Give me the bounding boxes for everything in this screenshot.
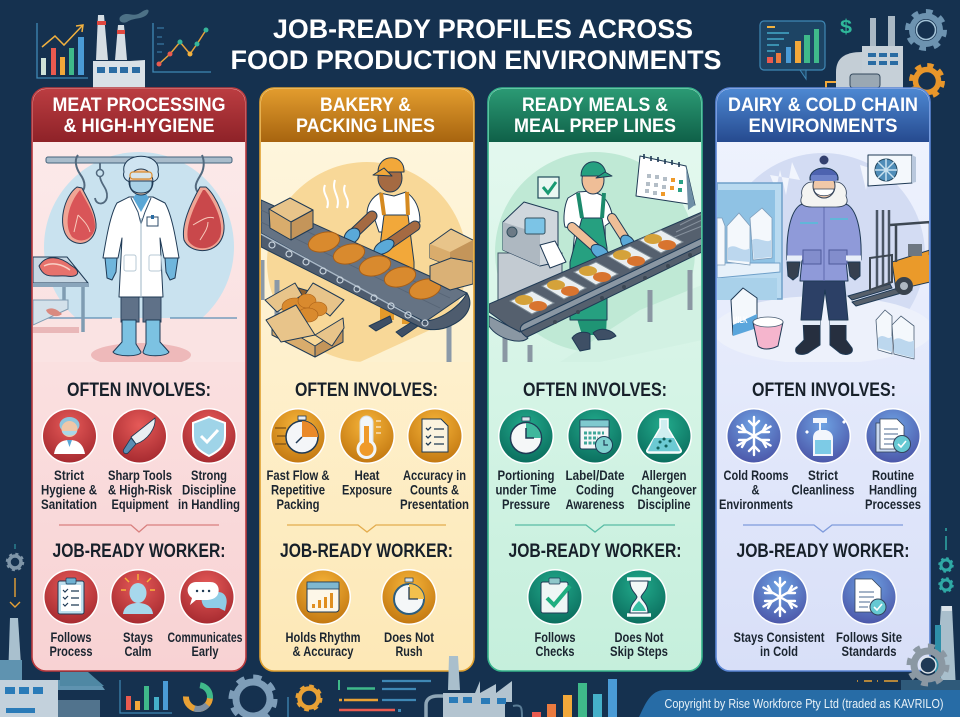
icon: bottom-right bar chart — [532, 679, 617, 717]
icon: hygiene worker — [42, 408, 98, 464]
text: routine handling — [865, 467, 921, 512]
text: strong discipline: Discipline — [182, 482, 236, 498]
text: cold rooms: Cold Rooms — [724, 467, 789, 483]
panel header: ready meals: MEAL PREP LINES — [514, 116, 676, 137]
panel header: meat processing: & HIGH-HYGIENE — [64, 116, 214, 137]
illustration: meal prep line — [489, 152, 702, 362]
text: sharp tools: Equipment — [112, 496, 169, 512]
text: fast flow — [266, 467, 330, 512]
text: does not skip steps — [610, 629, 668, 659]
text: holds rhythm: & Accuracy — [292, 643, 354, 659]
icon: flask — [636, 408, 692, 464]
text: portioning — [496, 467, 557, 512]
text: routine handling: Processes — [865, 496, 921, 512]
panel header: meat processing — [33, 89, 245, 142]
icon: routine document — [865, 408, 921, 464]
icon: snowflake — [726, 408, 782, 464]
panel header: bakery: PACKING LINES — [296, 116, 435, 137]
illustration: bakery conveyor worker — [261, 158, 473, 362]
text: follows site standards — [836, 629, 902, 659]
text: routine handling: Routine — [872, 467, 914, 483]
heading: job-ready bakery: JOB-READY WORKER: — [280, 541, 453, 562]
text: strict cleanliness — [792, 467, 855, 498]
icon: top-right dashboard — [760, 21, 825, 79]
panel header: bakery: BAKERY & — [320, 95, 411, 116]
illustration: cold chain worker: MILK — [732, 315, 748, 325]
text: follows checks: Checks — [536, 643, 575, 659]
title — [230, 14, 722, 75]
icon: knife — [112, 408, 168, 464]
text: allergen changeover: Discipline — [638, 496, 691, 512]
text: stays consistent — [734, 629, 825, 659]
panel header: ready meals — [489, 89, 701, 142]
icon: hourglass — [611, 569, 667, 625]
panel header: bakery — [261, 89, 473, 142]
heading: often involves meals: OFTEN INVOLVES: — [523, 380, 667, 401]
text: cold rooms: Environments — [719, 496, 793, 512]
panel: meat processing — [32, 88, 246, 671]
text: strict hygiene and sanitation: Hygiene & — [41, 482, 97, 498]
text: holds rhythm: Holds Rhythm — [286, 629, 360, 645]
text: accuracy: Presentation — [400, 496, 469, 512]
text: stays calm — [123, 629, 153, 659]
text: does not rush: Rush — [396, 643, 422, 659]
text: follows site standards: Follows Site — [836, 629, 902, 645]
text: allergen changeover — [632, 467, 697, 512]
text: stays calm: Calm — [124, 643, 152, 659]
text: cold rooms — [719, 467, 793, 512]
icon: green stopwatch — [498, 408, 554, 464]
text: label date coding — [566, 467, 625, 512]
text: communicates early: Early — [192, 643, 219, 659]
text: follows process — [50, 629, 93, 659]
text: label date coding: Awareness — [566, 496, 625, 512]
text: heat exposure — [342, 467, 392, 498]
text: stays calm: Stays — [123, 629, 153, 645]
panel header: ready meals: READY MEALS & — [522, 95, 668, 116]
icon: stopwatch — [381, 569, 437, 625]
icon: blue gear top-right — [908, 12, 944, 48]
icon group: right side gears — [940, 528, 952, 592]
text: strong discipline: in Handling — [178, 496, 240, 512]
icon: clipboard check — [527, 569, 583, 625]
title: JOB-READY PROFILES ACROSS — [273, 14, 693, 44]
icon: thermometer — [339, 408, 395, 464]
text: portioning: Pressure — [502, 496, 550, 512]
text: strong discipline — [178, 467, 240, 512]
panel header: dairy: ENVIRONMENTS — [748, 116, 898, 137]
panel: dairy and cold chain — [713, 88, 933, 671]
icon: fast stopwatch — [270, 408, 326, 464]
icon: soap pump — [795, 408, 851, 464]
heading: often involves: OFTEN INVOLVES: — [67, 380, 211, 401]
text: follows process: Follows — [50, 629, 92, 645]
icon: bottom bar chart — [120, 680, 172, 713]
text: does not skip steps: Does Not — [614, 629, 664, 645]
icon: top-left factory — [93, 10, 149, 88]
text: accuracy: Counts & — [410, 482, 459, 498]
text: strict cleanliness: Cleanliness — [792, 482, 855, 498]
text: strict hygiene and sanitation: Strict — [54, 467, 84, 483]
icon: orange gear top-right — [912, 66, 942, 96]
icon: small orange bottom gear — [288, 686, 320, 717]
icon: clipboard — [43, 569, 99, 625]
text: does not rush — [384, 629, 434, 659]
icon: large bottom gear — [232, 678, 274, 717]
text: does not rush: Does Not — [384, 629, 434, 645]
icon: corner gear — [910, 647, 946, 683]
icon: calendar with clock — [567, 408, 623, 464]
text: stays consistent: in Cold — [760, 643, 798, 659]
icon: checklist document — [407, 408, 463, 464]
text: does not skip steps: Skip Steps — [610, 643, 668, 659]
icon: top-right factory and machine — [826, 16, 903, 88]
icon: speech bubbles — [179, 569, 235, 625]
text: sharp tools — [108, 467, 172, 512]
text: sharp tools: Sharp Tools — [108, 467, 172, 483]
illustration: meat processing worker — [33, 152, 245, 367]
text: communicates early: Communicates — [168, 629, 243, 645]
text: strict hygiene and sanitation: Sanitation — [41, 496, 97, 512]
icon: snowflake consistent — [752, 569, 808, 625]
text: follows site standards: Standards — [842, 643, 897, 659]
icon: right side factory chimney — [901, 606, 960, 690]
text: stays consistent: Stays Consistent — [734, 629, 825, 645]
icon: calm person — [110, 569, 166, 625]
heading: job-ready dairy: JOB-READY WORKER: — [736, 541, 910, 562]
text: sharp tools: & High-Risk — [108, 482, 172, 498]
title: FOOD PRODUCTION ENVIRONMENTS — [230, 45, 722, 75]
decorative dashes — [857, 680, 898, 682]
text: heat exposure: Exposure — [342, 482, 392, 498]
text: follows process: Process — [50, 643, 93, 659]
text: routine handling: Handling — [869, 482, 917, 498]
icon: bottom-left factory — [0, 618, 105, 717]
text: fast flow: Fast Flow & — [266, 467, 330, 483]
text: accuracy — [400, 467, 469, 512]
text: fast flow: Repetitive — [271, 482, 325, 498]
text: follows checks — [534, 629, 576, 659]
heading: often involves dairy: OFTEN INVOLVES: — [752, 380, 896, 401]
icon: site standards document — [841, 569, 897, 625]
text: follows checks: Follows — [534, 629, 576, 645]
icon group: left side gear and arrow — [7, 544, 23, 607]
text: communicates early — [168, 629, 243, 659]
text: allergen changeover: Allergen — [642, 467, 686, 483]
panel: bakery and packing — [260, 88, 474, 671]
text: strong discipline: Strong — [191, 467, 227, 483]
text: accuracy: Accuracy in — [403, 467, 466, 483]
text: label date coding: Label/Date — [566, 467, 625, 483]
panel: ready meals — [488, 88, 702, 671]
text: heat exposure: Heat — [354, 467, 380, 483]
text: portioning: Portioning — [498, 467, 554, 483]
icon: bottom middle factory — [426, 656, 522, 717]
icon: donut chart — [181, 680, 215, 714]
text: allergen changeover: Changeover — [632, 482, 697, 498]
icon: calendar bars — [295, 569, 351, 625]
panel header: dairy: DAIRY & COLD CHAIN — [728, 95, 918, 116]
text: strict cleanliness: Strict — [808, 467, 838, 483]
illustration: cold chain worker — [713, 153, 933, 364]
icon: dollar sign: $ — [840, 17, 852, 38]
footer copyright bar — [639, 690, 960, 717]
panel header: meat processing: MEAT PROCESSING — [52, 95, 226, 116]
icon: bottom text lines — [339, 680, 431, 712]
icon group: top-left bar chart — [37, 23, 88, 78]
text: portioning: under Time — [496, 482, 557, 498]
heading: job-ready meals: JOB-READY WORKER: — [508, 541, 682, 562]
text: cold rooms: & — [752, 482, 760, 498]
text: fast flow: Packing — [276, 496, 320, 512]
heading: often involves bakery: OFTEN INVOLVES: — [295, 380, 438, 401]
icon: shield — [181, 408, 237, 464]
text: label date coding: Coding — [576, 482, 614, 498]
heading: job-ready worker: JOB-READY WORKER: — [52, 541, 226, 562]
text: holds rhythm — [286, 629, 360, 659]
panel header: dairy — [717, 89, 929, 142]
icon group: top-left line chart — [153, 23, 211, 72]
text: strict hygiene and sanitation — [41, 467, 97, 512]
